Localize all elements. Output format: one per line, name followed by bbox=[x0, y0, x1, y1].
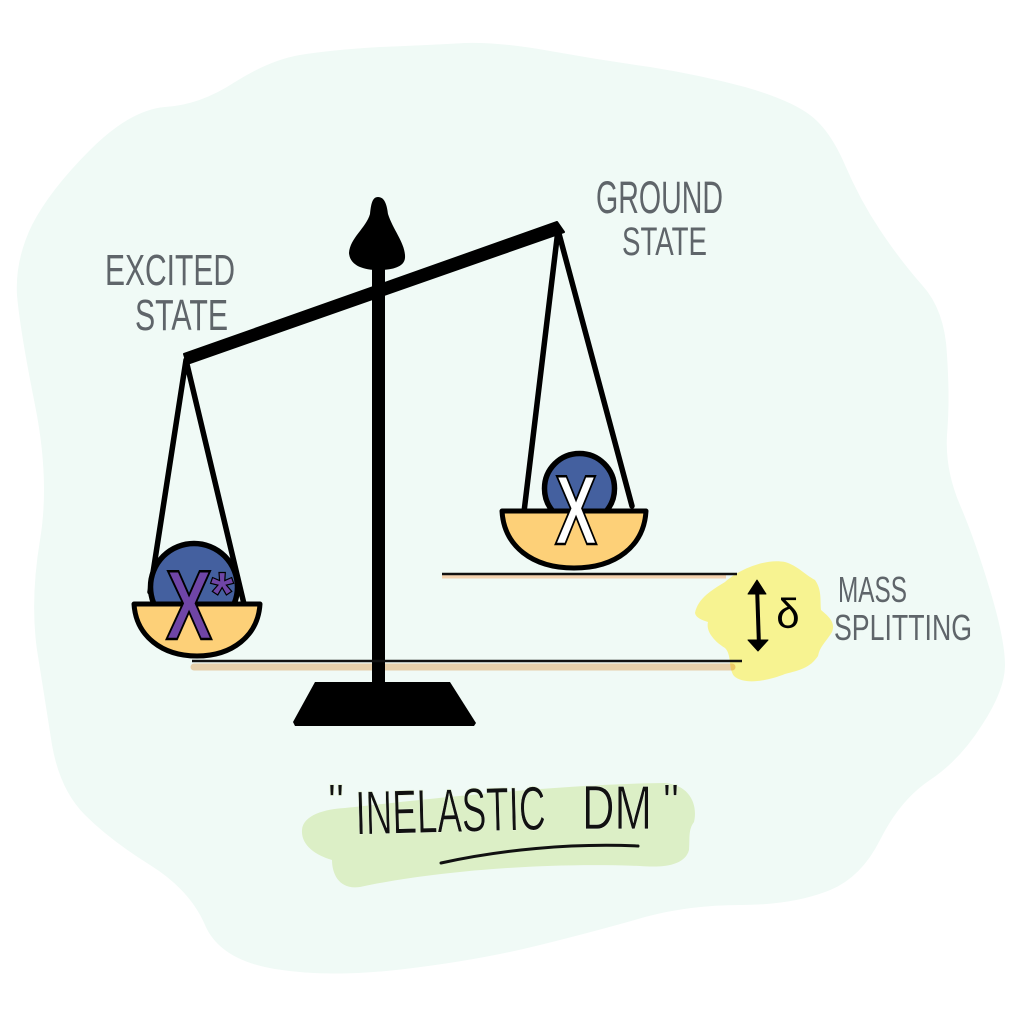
left pan strings bbox=[150, 360, 244, 604]
label: ground state: STATE bbox=[622, 220, 707, 264]
green highlight bbox=[302, 783, 695, 887]
title: inelastic DM: INELASTIC bbox=[355, 775, 546, 848]
label: excited state bbox=[105, 246, 235, 340]
label: mass splitting bbox=[834, 569, 972, 648]
left pan bowl bbox=[134, 604, 260, 656]
title: inelastic DM: " bbox=[328, 774, 344, 830]
label: ground state: GROUND bbox=[596, 172, 723, 223]
balance scale stand bbox=[293, 197, 476, 726]
title underline bbox=[441, 845, 638, 863]
label: mass splitting: SPLITTING bbox=[834, 607, 972, 648]
excited state ball bbox=[150, 544, 238, 630]
balance beam bbox=[184, 222, 564, 364]
right pan strings bbox=[524, 230, 632, 512]
upper level line bbox=[442, 574, 737, 576]
title: inelastic DM: DM bbox=[582, 774, 652, 843]
label: excited state: EXCITED bbox=[105, 246, 235, 295]
ground state ball bbox=[544, 454, 614, 524]
delta symbol: δ bbox=[776, 590, 800, 637]
label: mass splitting: MASS bbox=[838, 569, 907, 610]
excited chi symbol: X bbox=[166, 550, 212, 660]
excitation star: * bbox=[210, 560, 234, 627]
label: excited state: STATE bbox=[135, 291, 228, 340]
ground chi symbol: X bbox=[555, 455, 597, 565]
lower level line bbox=[192, 661, 742, 667]
label: ground state bbox=[596, 172, 723, 264]
delta double arrow bbox=[748, 580, 768, 651]
title: inelastic DM: " bbox=[663, 774, 679, 830]
right pan bowl bbox=[502, 511, 646, 568]
right pan with ground state particle bbox=[502, 230, 646, 568]
yellow highlight bbox=[695, 561, 833, 681]
left pan with excited particle bbox=[134, 360, 260, 660]
